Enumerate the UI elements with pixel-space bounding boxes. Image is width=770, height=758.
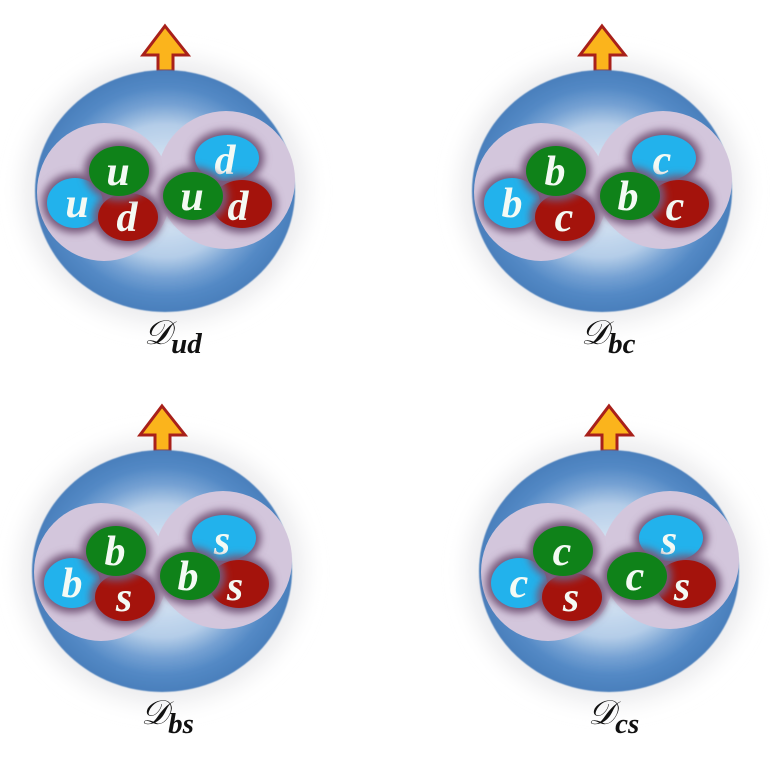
quark: cyan d <box>190 130 264 186</box>
quark: red s <box>651 555 721 613</box>
arrow: spin up <box>143 26 188 71</box>
quark: cyan u: u <box>65 181 89 227</box>
label: cs <box>615 708 639 740</box>
quark: green b <box>521 141 591 201</box>
quark: cyan b <box>39 553 105 613</box>
label: bs <box>168 708 194 740</box>
quark: green b <box>155 547 225 605</box>
quark: green u <box>84 141 154 201</box>
arrow: spin up <box>587 406 632 451</box>
quark: red d: d <box>116 195 138 241</box>
quark: red d: d <box>228 184 250 230</box>
panel: diquark bc <box>460 26 744 360</box>
quark: green u <box>158 167 228 225</box>
quark: red c <box>530 188 600 246</box>
quark: green b <box>595 167 665 225</box>
sphere <box>35 70 295 312</box>
quark: cyan b: b <box>62 561 82 607</box>
quark: green c: c <box>553 529 572 575</box>
quark: green b: b <box>178 554 198 600</box>
panel: diquark ud <box>23 26 307 360</box>
quark: green c <box>602 547 672 605</box>
quark: cyan s <box>187 510 261 566</box>
quark: green u: u <box>106 149 130 195</box>
lobe: left <box>481 503 615 641</box>
lobe: right <box>594 111 732 249</box>
quark: green c: c <box>626 554 645 600</box>
label: 𝒟 <box>144 315 171 352</box>
sphere <box>479 450 739 692</box>
quark: green c <box>528 521 598 581</box>
panel: diquark bs <box>20 406 304 740</box>
quark: red s: s <box>673 564 690 610</box>
quark: green u: u <box>180 174 204 220</box>
quark: cyan d: d <box>214 138 236 184</box>
quark: green b <box>81 521 151 581</box>
quark: red s <box>537 568 607 626</box>
quark: red c <box>644 175 714 233</box>
quark: green b: b <box>618 174 638 220</box>
label: ud <box>171 328 202 360</box>
quark: red c: c <box>555 195 574 241</box>
quark: cyan s <box>634 510 708 566</box>
panel: diquark cs <box>467 406 751 740</box>
sphere <box>32 450 292 692</box>
quark: cyan s: s <box>660 518 677 564</box>
quark: cyan c <box>627 130 701 186</box>
quark: cyan b: b <box>502 181 522 227</box>
quark: red c: c <box>666 184 685 230</box>
quark: red d <box>93 188 163 246</box>
quark: cyan c: c <box>510 561 529 607</box>
quark: green b: b <box>544 149 566 195</box>
quark: red s: s <box>115 575 132 621</box>
quark: cyan s: s <box>213 518 230 564</box>
quark: red s <box>204 555 274 613</box>
label: 𝒟 <box>588 695 615 732</box>
quark: cyan c: c <box>653 138 672 184</box>
quark: red s: s <box>562 575 579 621</box>
quark: cyan u <box>42 173 108 233</box>
lobe: left <box>34 503 168 641</box>
lobe: right <box>601 491 739 629</box>
label: bc <box>608 328 636 360</box>
quark: red s <box>90 568 160 626</box>
quark: red s: s <box>226 564 243 610</box>
lobe: left <box>37 123 171 261</box>
quark: red d <box>207 175 277 233</box>
quark: cyan c <box>486 553 552 613</box>
label: 𝒟 <box>581 315 608 352</box>
sphere <box>472 70 732 312</box>
quark: green b: b <box>104 529 126 575</box>
lobe: right <box>157 111 295 249</box>
quark: cyan b <box>479 173 545 233</box>
arrow: spin up <box>580 26 625 71</box>
label: 𝒟 <box>141 695 168 732</box>
arrow: spin up <box>140 406 185 451</box>
lobe: right <box>154 491 292 629</box>
lobe: left <box>474 123 608 261</box>
